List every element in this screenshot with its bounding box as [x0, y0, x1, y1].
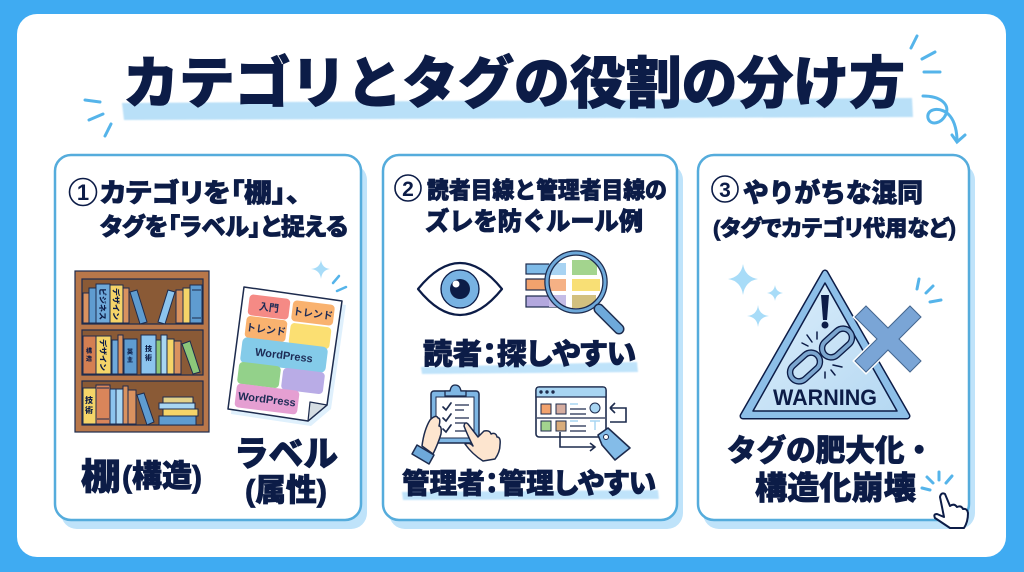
- text: bloat and collapse: タグの肥大化・: [727, 434, 934, 468]
- icon: eye: [418, 263, 502, 315]
- panel 1 number: [70, 178, 96, 206]
- label: shelf (structure): (構造): [122, 459, 202, 494]
- icon: sheet of colored labels: 入門: [258, 301, 280, 315]
- icon: bookshelf: [75, 271, 209, 432]
- panel 3 number: [712, 176, 738, 202]
- book labels: 術: [145, 353, 152, 362]
- panel 2 number: 2: [402, 178, 414, 201]
- panel 3: common confusion: [698, 155, 975, 529]
- icon: sparkle near labels: [311, 260, 346, 291]
- accent marks: title right with curly arrow: [911, 36, 965, 142]
- icon: sparkles: [728, 264, 783, 327]
- book labels: 技: [85, 395, 93, 405]
- panel 1 number: 1: [77, 180, 89, 205]
- panel 2: reader and admin: [383, 155, 683, 529]
- icon: admin window with tag: [536, 387, 630, 460]
- icon: pointing hand cursor: [922, 472, 968, 528]
- book labels: 技: [145, 344, 152, 353]
- icon: broken chain: [786, 325, 856, 385]
- label: label (attribute): [234, 435, 338, 508]
- book labels: ビジネス: [98, 288, 108, 320]
- icon: sheet of colored labels: トレンド: [292, 307, 333, 322]
- book labels: [85, 288, 152, 415]
- text: bloat and collapse: 構造化崩壊: [755, 470, 916, 506]
- book labels: 造: [86, 355, 92, 363]
- panel 2 heading: ズレを防ぐルール例: [425, 207, 643, 236]
- panel 1 heading: [100, 178, 348, 241]
- panel 1 heading: カテゴリを「棚」、: [100, 178, 300, 208]
- panel 2 heading: 読者目線と管理者目線の: [427, 177, 667, 203]
- title: カテゴリとタグの役割の分け方: [123, 52, 905, 115]
- panel 2 number: [395, 175, 421, 201]
- book labels: 術: [85, 405, 93, 415]
- label: shelf (structure): 棚: [81, 456, 121, 497]
- panel 1: category and tag: [55, 155, 367, 529]
- text: admin easy to manage: 管理者：管理しやすい: [402, 467, 656, 499]
- text: bloat and collapse: [727, 434, 934, 506]
- panel 3 heading: (タグでカテゴリ代用など): [713, 216, 956, 241]
- icon: sheet of colored labels: [228, 287, 346, 426]
- panel 1 heading: タグを「ラベル」と捉える: [100, 213, 348, 241]
- icon: sheet of colored labels: トレンド: [245, 323, 286, 338]
- icon: sheet of colored labels: WordPress: [237, 391, 296, 409]
- icon: warning triangle: [743, 273, 907, 416]
- icon: warning triangle: WARNING: [773, 385, 877, 410]
- book labels: 主: [127, 356, 133, 364]
- book labels: 英: [127, 348, 133, 356]
- icon: clipboard with hands: [412, 385, 500, 464]
- icon: cross mark: [855, 306, 921, 372]
- accent marks: title left: [85, 100, 111, 136]
- label: label (attribute): ラベル: [234, 435, 338, 474]
- book labels: デザイン: [112, 288, 122, 321]
- book labels: 構: [86, 347, 92, 355]
- panel 3 number: 3: [719, 179, 731, 202]
- book labels: デザイン: [98, 339, 108, 372]
- panel 3 heading: [713, 178, 956, 241]
- icon: sheet of colored labels: WordPress: [254, 347, 313, 365]
- text: reader easy to find: 読者：探しやすい: [423, 338, 636, 371]
- panel 2 heading: [425, 177, 667, 236]
- label: label (attribute): (属性): [245, 473, 327, 508]
- accent marks: cross: [917, 279, 941, 302]
- label: shelf (structure): [81, 456, 202, 497]
- icon: magnifier over table: [526, 253, 619, 329]
- panel 3 heading: やりがちな混同: [743, 178, 923, 208]
